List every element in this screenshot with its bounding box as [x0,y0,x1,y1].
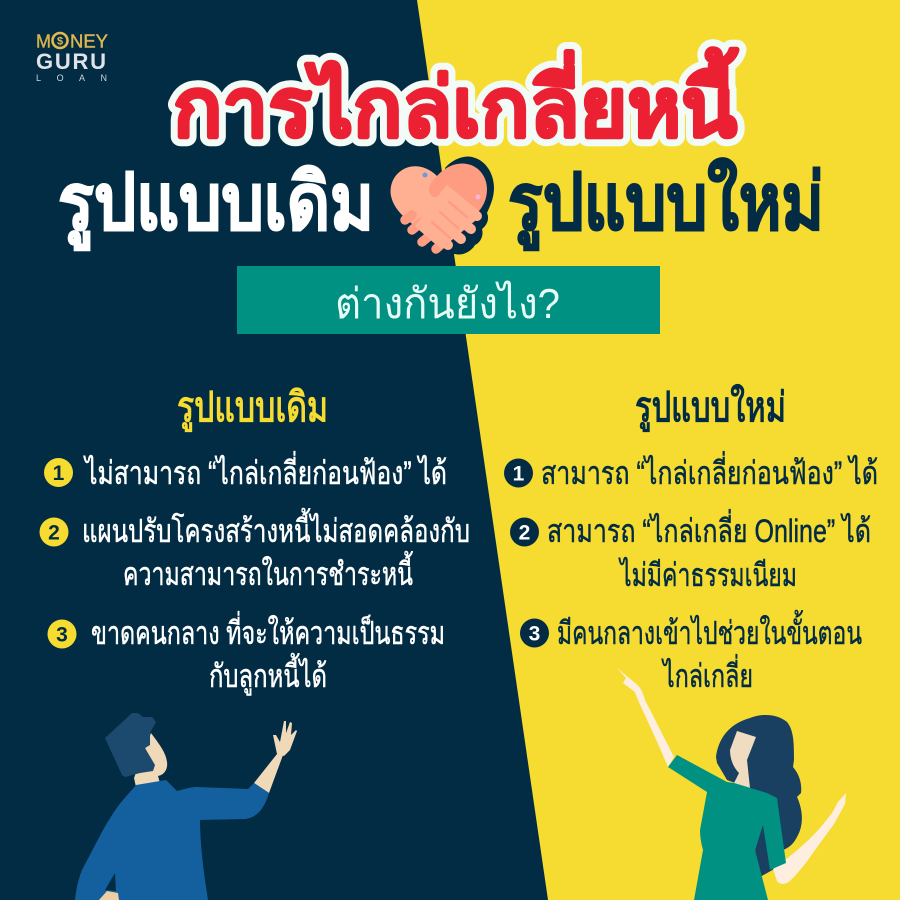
title: การไกล่เกลี่ยหนี้ [173,47,739,154]
title: การไกล่เกลี่ยหนี้ [173,47,739,154]
illustration: man raising hand [75,713,297,900]
logo: Money Guru Loan [36,32,108,83]
logo: Money Guru Loan: M [36,32,51,52]
subtitle: old format: รูปแบบเดิม [58,158,374,251]
icon: handshake heart [391,157,494,255]
item 3 text: ไกล่เกลี่ย [661,654,753,694]
heading: old format: รูปแบบเดิม [177,384,328,433]
item 1 badge: 1 [513,462,525,486]
item 2 text: ไม่มีค่าธรรมเนียม [618,557,797,593]
item 2 text: ความสามารถในการชำระหนี้ [123,551,414,592]
item 2 text: แผนปรับโครงสร้างหนี้ไม่สอดคล้องกับ [82,508,470,549]
panel: old format list [40,384,470,696]
item 3 badge [520,618,549,648]
item 3 text [91,611,445,696]
item 2 badge: 2 [519,522,530,544]
item 3 text: กับลูกหนี้ได้ [209,653,327,696]
logo: Money Guru Loan: L O A N [36,73,107,83]
item 1 badge [504,458,533,488]
item 3 badge: 3 [56,624,68,646]
subheading box [237,266,660,334]
item 1 badge [44,458,73,487]
logo: Money Guru Loan: GURU [36,49,106,74]
item 2 badge [40,518,68,546]
item 2 badge: 2 [48,522,60,544]
subtitle: new format: รูปแบบใหม่ [508,157,824,251]
illustration: woman raising arms [617,668,846,900]
heading: new format: รูปแบบใหม่ [635,383,786,433]
item 1 badge: 1 [53,462,65,485]
item 3 text [557,610,862,694]
logo: Money Guru Loan: $ [57,36,63,48]
logo: Money Guru Loan: NEY [70,32,108,52]
panel: yellow background right [417,0,900,900]
item 2 text [547,509,871,593]
item 2 text [82,508,470,592]
item 2 badge [510,518,539,546]
panel: new format list [504,383,878,694]
subheading box: ต่างกันยังไง? [335,280,560,327]
item 3 text: ขาดคนกลาง ที่จะให้ความเป็นธรรม [91,611,445,651]
item 3 badge [48,620,76,648]
item 1 text: ไม่สามารถ “ไกล่เกลี่ยก่อนฟ้อง” ได้ [83,451,447,491]
item 3 badge: 3 [529,622,540,646]
